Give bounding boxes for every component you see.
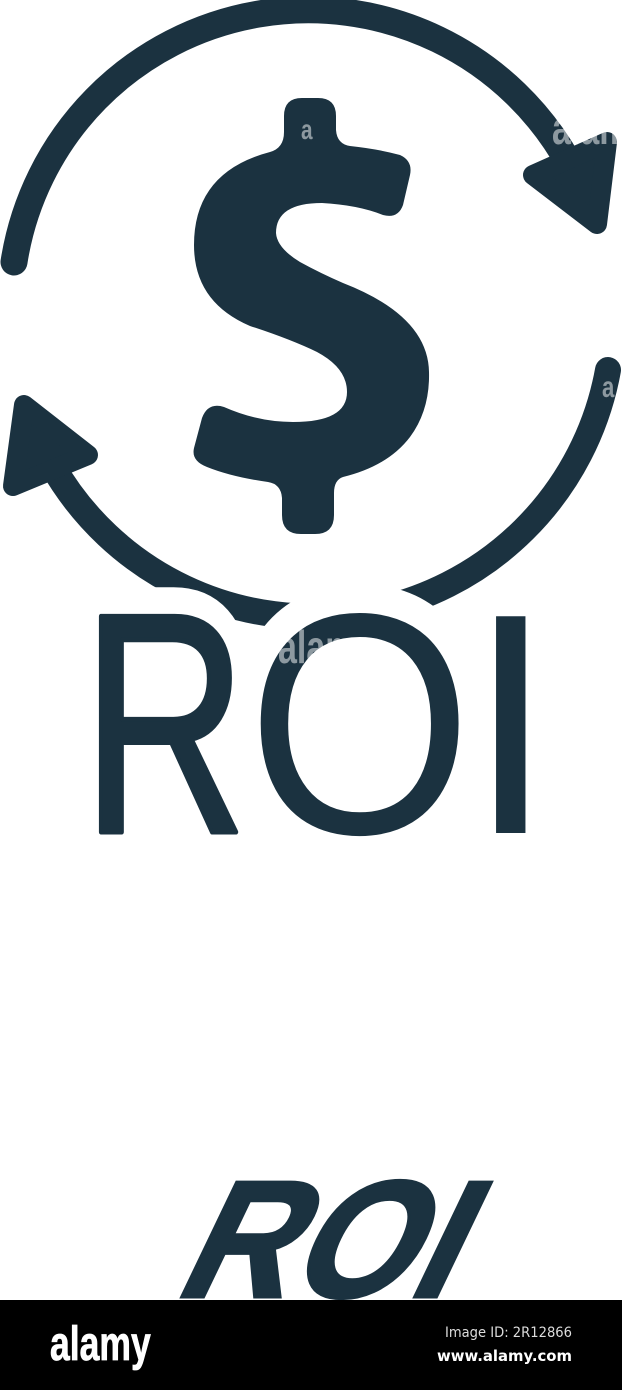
halo behind big letters: O — [247, 549, 472, 901]
icon: dollar sign — [194, 98, 429, 534]
watermark: alamy marks — [278, 102, 622, 673]
halo behind big letters: R — [81, 549, 246, 901]
icon: circular arrows — [13, 10, 608, 617]
footer bar — [0, 1300, 622, 1390]
title: ROI large letters: R — [82, 550, 247, 899]
title: ROI large letters: I — [467, 548, 555, 900]
halo behind big letters — [81, 549, 472, 901]
website: www.alamy.com — [437, 1347, 572, 1365]
subtitle: ROI italic: ROI — [154, 1147, 519, 1333]
arrow: upper arc — [14, 10, 607, 262]
logo: alamy: alamy — [50, 1317, 151, 1370]
title: ROI large letters — [82, 548, 555, 901]
arrow: lower arc — [13, 370, 608, 617]
watermark: alamy marks: a — [301, 115, 313, 146]
title: ROI large letters: O — [247, 549, 472, 901]
watermark: alamy marks: a — [602, 370, 615, 404]
image id: Image ID: 2R12866 — [445, 1325, 572, 1341]
watermark: alamy marks: alamy — [278, 621, 375, 673]
